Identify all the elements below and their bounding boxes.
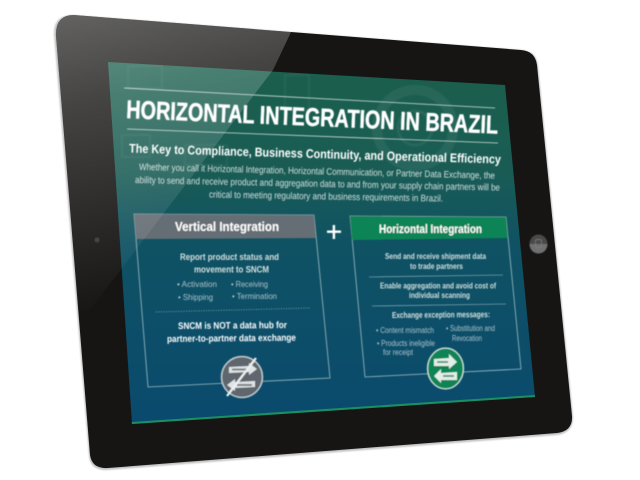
vertical note bbox=[167, 320, 296, 345]
vertical report text: Report product status and bbox=[180, 252, 279, 262]
tablet device bbox=[50, 10, 573, 470]
screen bbox=[108, 62, 535, 424]
send text: Send and receive shipment data bbox=[385, 251, 486, 261]
title: HORIZONTAL INTEGRATION IN BRAZIL bbox=[126, 96, 499, 140]
exchange bullet list: • Content mismatch bbox=[376, 326, 434, 335]
horizontal header bbox=[350, 216, 508, 240]
intro text bbox=[135, 162, 500, 205]
exchange bullet list bbox=[376, 324, 495, 357]
vertical report text: movement to SNCM bbox=[194, 264, 269, 274]
icon: crossed data exchange bbox=[222, 356, 262, 398]
vertical header bbox=[134, 214, 316, 239]
vertical note: partner-to-partner data exchange bbox=[167, 333, 296, 345]
send text: to trade partners bbox=[410, 261, 463, 271]
vertical report text bbox=[180, 252, 279, 274]
bottom accent line bbox=[132, 395, 535, 424]
send text bbox=[385, 251, 486, 271]
enable text: Enable aggregation and avoid cost of bbox=[380, 280, 496, 290]
panel: horizontal integration bbox=[350, 216, 521, 377]
icon: camera bbox=[94, 238, 100, 242]
intro text: ability to send and receive product and aggregation data to and from your supply chain partners will be bbox=[135, 175, 500, 194]
icon: home button bbox=[530, 234, 548, 254]
vertical bullet list: • Receiving bbox=[231, 279, 268, 289]
title block bbox=[124, 88, 501, 167]
panel: vertical integration bbox=[134, 214, 330, 387]
icon: plus bbox=[327, 225, 341, 239]
vertical header: Vertical Integration bbox=[175, 220, 279, 234]
icon: data exchange arrows bbox=[428, 348, 464, 389]
intro text: critical to meeting regulatory and business requirements in Brazil. bbox=[209, 190, 443, 205]
vertical bullet list: • Shipping bbox=[178, 292, 213, 302]
exchange bullet list: for receipt bbox=[383, 348, 414, 357]
enable text: individual scanning bbox=[409, 290, 470, 300]
vertical note: SNCM is NOT a data hub for bbox=[178, 320, 287, 332]
exchange heading: Exchange exception messages: bbox=[392, 309, 490, 320]
enable text bbox=[380, 280, 496, 300]
vertical bullet list: • Termination bbox=[232, 291, 277, 301]
horizontal header: Horizontal Integration bbox=[379, 222, 482, 236]
background pattern icons bbox=[122, 66, 453, 166]
exchange bullet list: • Products ineligible bbox=[377, 339, 435, 348]
subtitle: The Key to Compliance, Business Continuity, and Operational Efficiency bbox=[129, 142, 501, 167]
intro text: Whether you call it Horizontal Integration, Horizontal Communication, or Partner Data Exchange, the bbox=[139, 162, 495, 182]
exchange bullet list: • Substitution and bbox=[446, 324, 495, 333]
vertical bullet list bbox=[177, 279, 277, 302]
glare reflection bbox=[56, 15, 291, 282]
exchange bullet list: Revocation bbox=[452, 334, 482, 343]
vertical bullet list: • Activation bbox=[177, 279, 217, 289]
